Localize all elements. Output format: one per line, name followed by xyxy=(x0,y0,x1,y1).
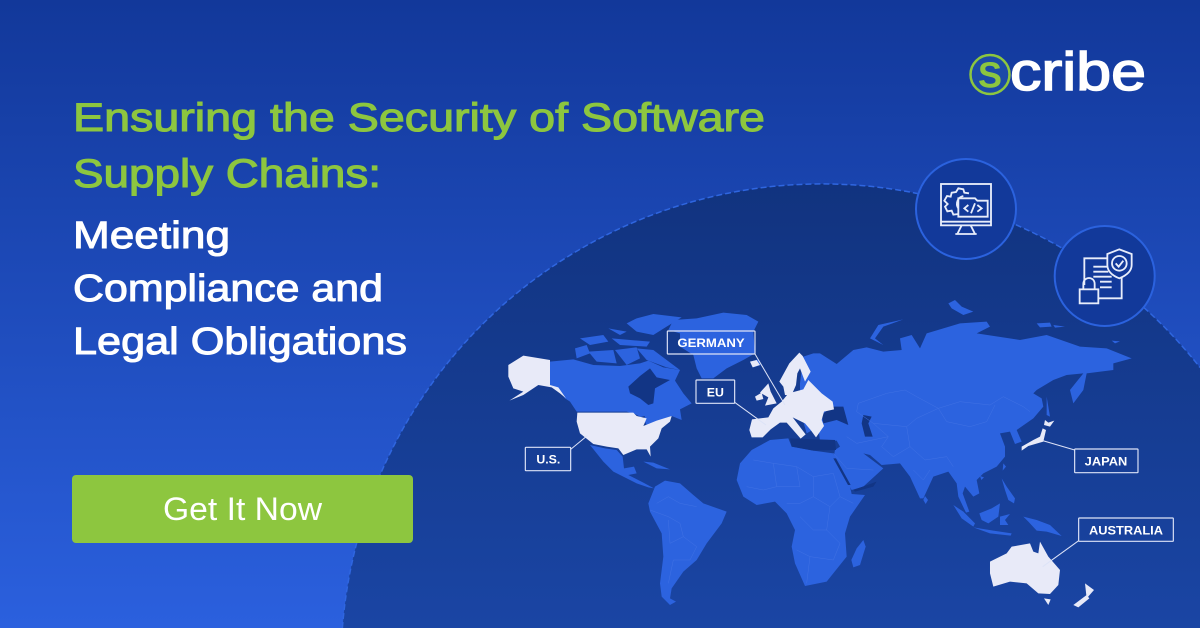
label: Japan: JAPAN xyxy=(1085,454,1127,468)
subtitle: white heading xyxy=(73,215,407,363)
title: green heading: Supply Chains: xyxy=(73,152,381,196)
map: highlighted countries xyxy=(508,353,1094,607)
label: EU: EU xyxy=(707,385,724,399)
title: green heading: Ensuring the Security of Software xyxy=(73,96,765,140)
label: U.S. xyxy=(525,447,571,471)
label: Japan xyxy=(1075,449,1138,473)
label: Germany: GERMANY xyxy=(677,336,745,350)
button: Get It Now: Get It Now xyxy=(163,491,323,527)
logo: scribe xyxy=(970,42,1146,102)
map: land masses xyxy=(550,300,1132,605)
map: leader lines xyxy=(571,354,1079,567)
subtitle: white heading: Legal Obligations xyxy=(73,321,407,363)
label: Germany xyxy=(667,331,755,354)
icon: monitor with code xyxy=(916,159,1016,259)
map: country borders xyxy=(650,390,1030,583)
button: Get It Now xyxy=(72,475,413,543)
icon: document, shield and lock xyxy=(1055,226,1155,326)
logo: scribe: S xyxy=(978,54,1002,96)
world map xyxy=(508,300,1173,607)
subtitle: white heading: Compliance and xyxy=(73,268,383,310)
globe: dashed dark circle xyxy=(342,184,1200,628)
map: water overlays xyxy=(628,368,877,492)
logo: scribe: cribe xyxy=(1010,42,1146,102)
title: green heading xyxy=(73,96,765,196)
label: Australia xyxy=(1079,518,1173,541)
subtitle: white heading: Meeting xyxy=(73,215,230,257)
label: EU xyxy=(696,380,735,403)
label: Australia: AUSTRALIA xyxy=(1089,523,1163,537)
label: U.S.: U.S. xyxy=(536,453,560,467)
